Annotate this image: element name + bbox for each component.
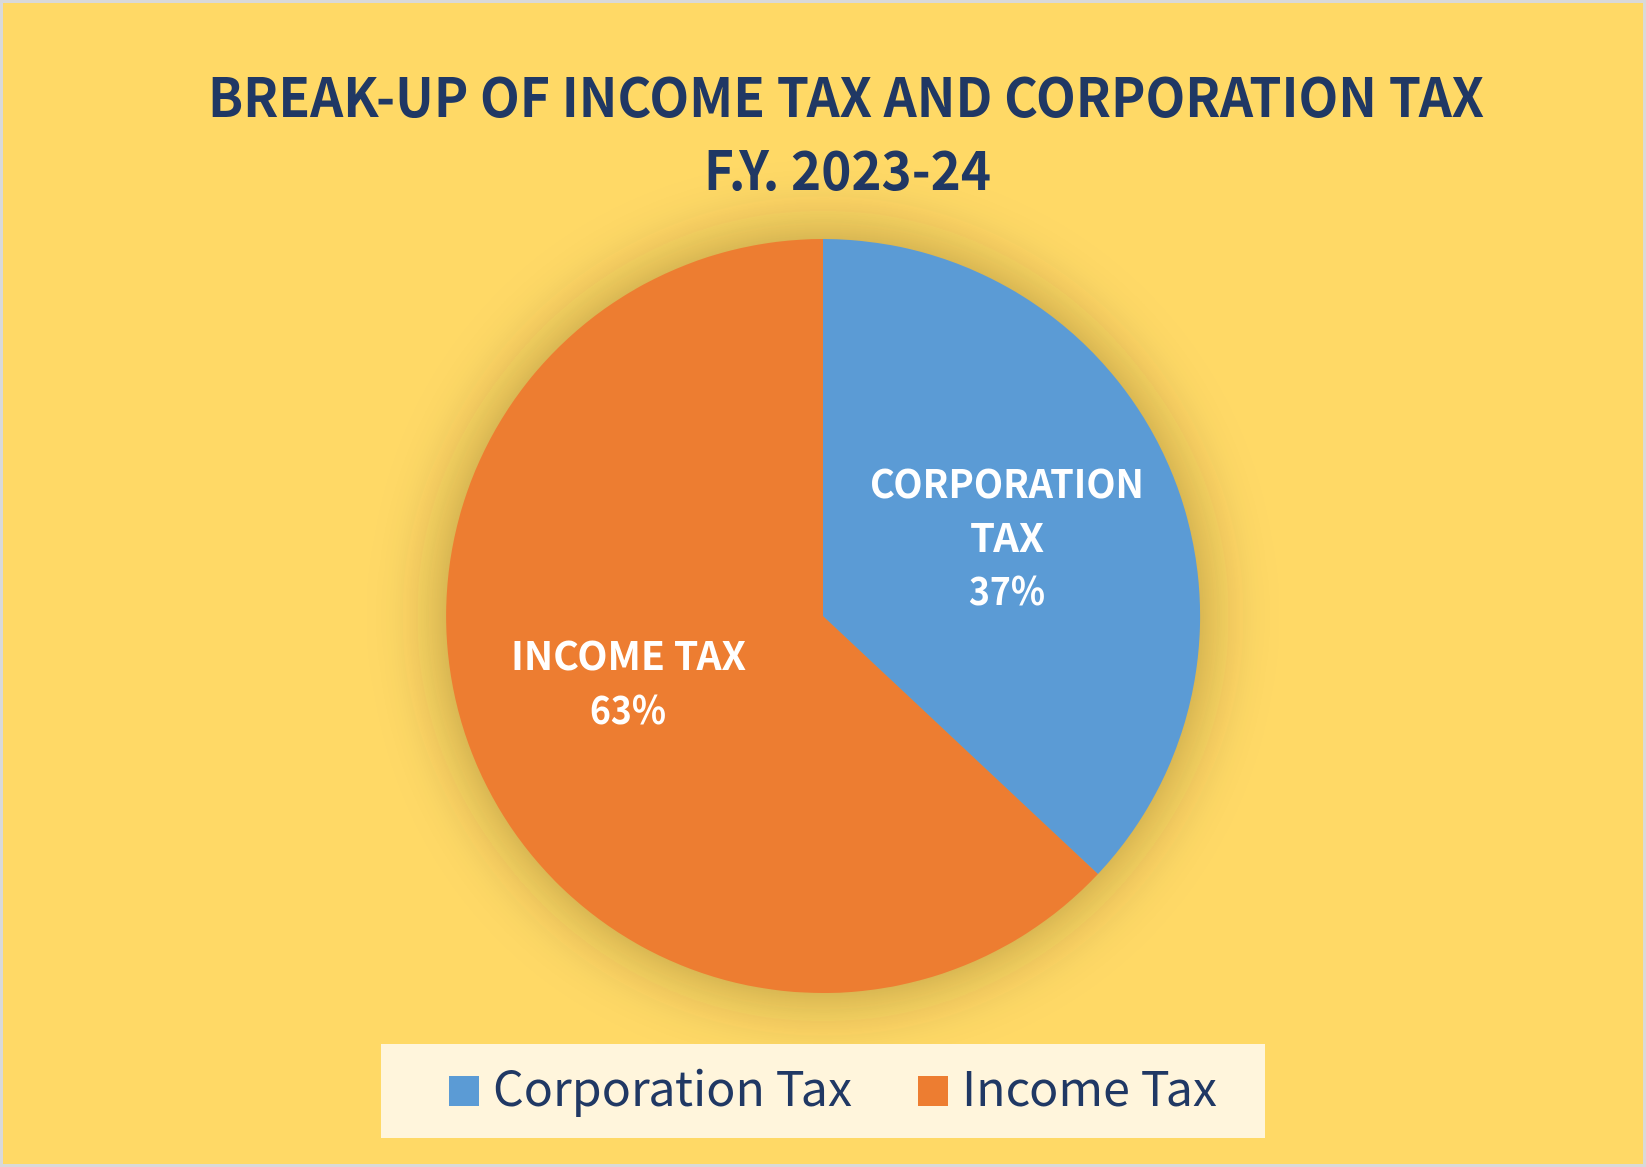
label: corporation tax: CORPORATION	[870, 454, 1144, 510]
legend label: income tax: Income Tax	[962, 1050, 1217, 1120]
legend label: corporation tax: Corporation Tax	[493, 1050, 852, 1120]
label: corporation tax	[870, 454, 1144, 617]
title: F.Y. 2023-24	[704, 127, 991, 206]
slice: corporation tax 37%	[823, 239, 1200, 874]
legend swatch: corporation tax	[449, 1076, 479, 1106]
title: BREAK-UP OF INCOME TAX AND CORPORATION TAX	[208, 54, 1484, 133]
label: income tax: 63%	[590, 680, 666, 736]
legend swatch: income tax	[918, 1076, 948, 1106]
legend	[381, 1044, 1265, 1138]
legend background	[381, 1044, 1265, 1138]
label: corporation tax: TAX	[970, 508, 1044, 564]
label: income tax: INCOME TAX	[511, 626, 746, 682]
title	[208, 54, 1484, 206]
pie chart	[439, 232, 1207, 1000]
label: income tax	[511, 626, 746, 736]
slice: income tax 63%	[446, 239, 1098, 993]
label: corporation tax: 37%	[969, 561, 1045, 617]
pie shadow	[439, 232, 1207, 1000]
